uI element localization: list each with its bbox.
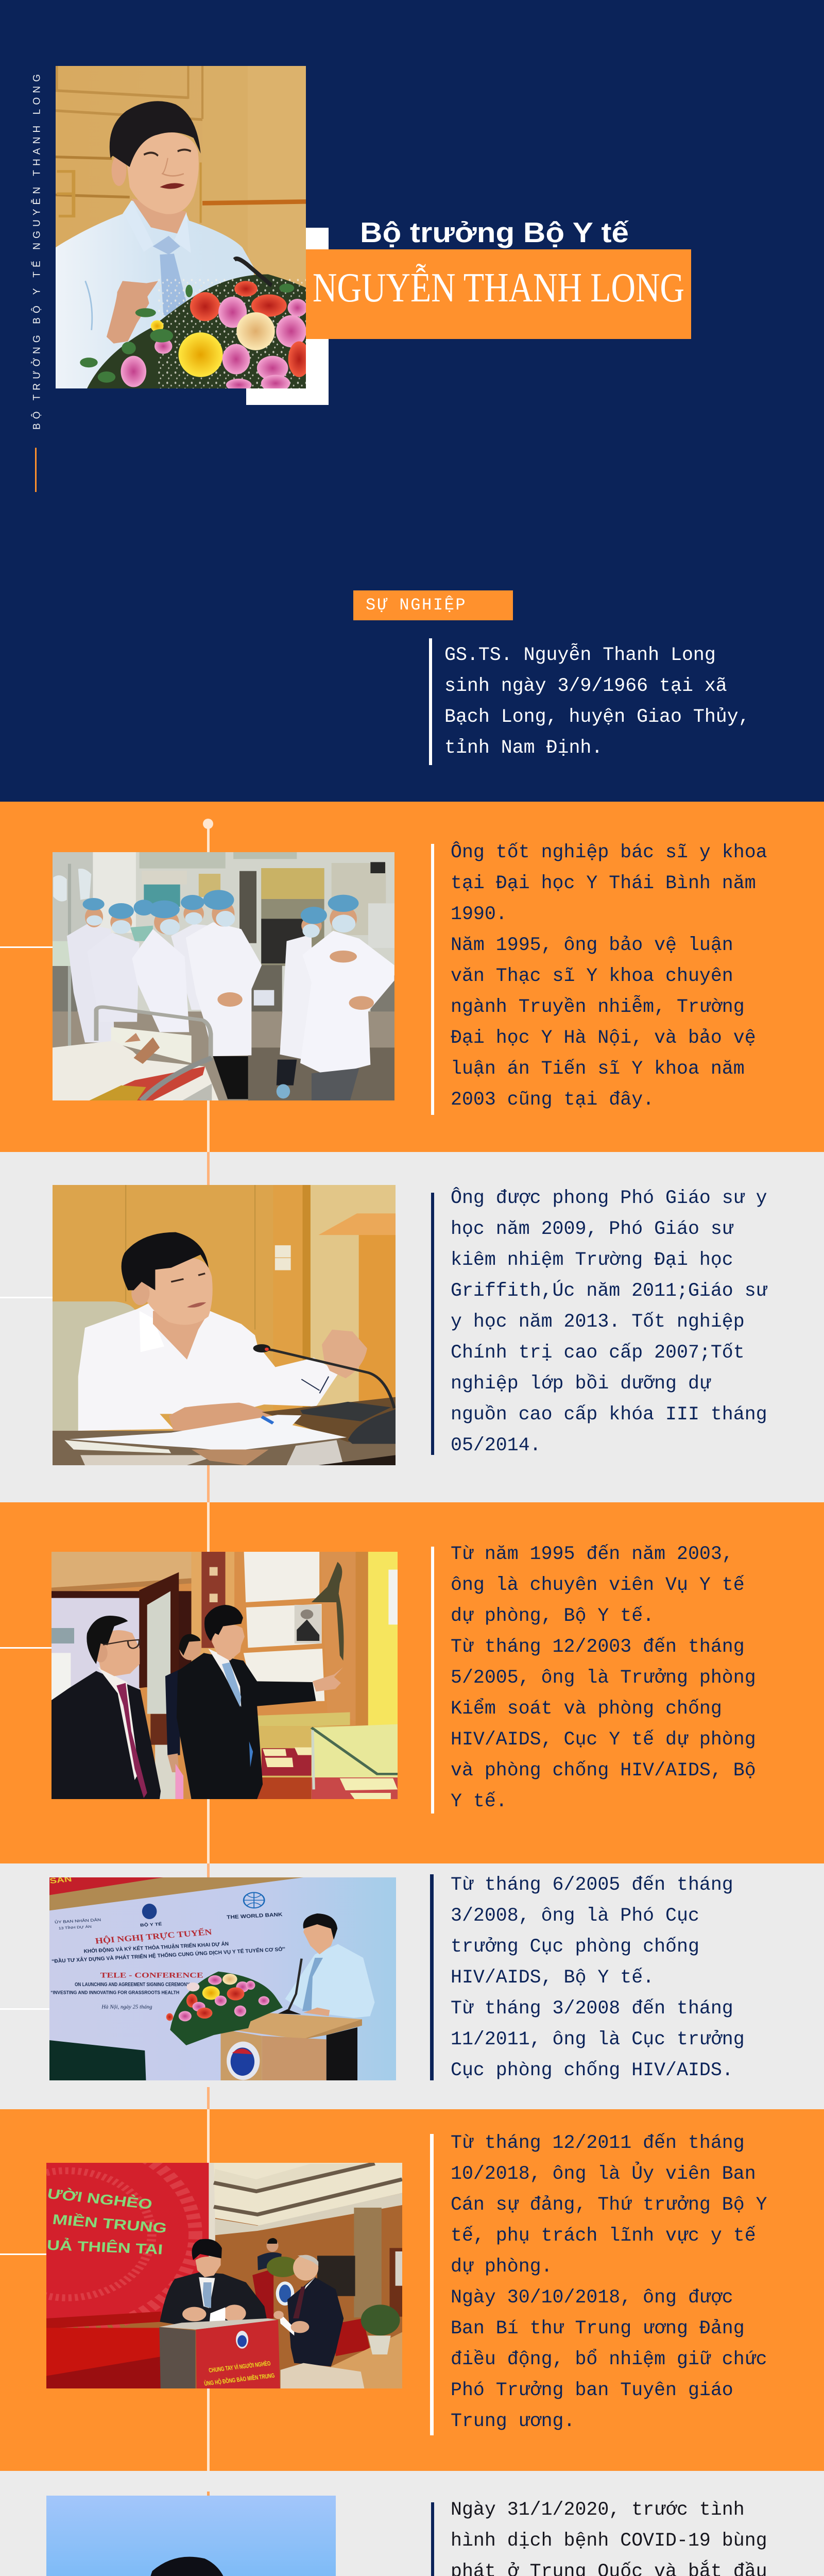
- section tag: career: SỰ NGHIỆP: [366, 596, 467, 615]
- name banner: [306, 249, 691, 339]
- section tag: career: [353, 590, 513, 620]
- accent bar: [429, 638, 432, 765]
- text: 2005–2011 roles: Từ tháng 6/2005 đến tháng 3/2008, ông là Phó Cục trưởng Cục phòng chống HIV/AIDS, Bộ Y tế. Từ tháng 3/2008 đến tháng 11/2011, ông là Cục trưởng Cục phòng chống HIV/AIDS.: [451, 1874, 745, 2081]
- photo: tele-conference speech: [49, 1877, 396, 2080]
- photo: doctors at hospital bedside: [53, 852, 394, 1100]
- banner text: “ĐẦU TƯ XÂY DỰNG VÀ PHÁT TRIỂN HỆ THỐNG CUNG ỨNG DỊCH VỤ Y TẾ TUYẾN CƠ SỞ”: [52, 1946, 286, 1964]
- panel: academic titles: [0, 1152, 824, 1502]
- banner text: KHỞI ĐỘNG VÀ KÝ KẾT THỎA THUẬN TRIỂN KHAI DỰ ÁN: [83, 1941, 229, 1954]
- panel: hero header: [0, 0, 824, 802]
- slogan on screen: [46, 2185, 168, 2257]
- text: 2011–2018 roles: Từ tháng 12/2011 đến tháng 10/2018, ông là Ủy viên Ban Cán sự đảng, Thứ trưởng Bộ Y tế, phụ trách lĩnh vực y tế dự phòng. Ngày 30/10/2018, ông được Ban Bí thư Trung ương Đảng điều động, bổ nhiệm giữ chức Phó Trưởng ban Tuyên giáo Trung ương.: [451, 2132, 767, 2432]
- donation box: ỦNG HỘ ĐỒNG BÀO MIỀN TRUNG: [203, 2371, 276, 2387]
- white backing block: [246, 228, 329, 405]
- title: Bộ trưởng Bộ Y tế: [360, 216, 629, 248]
- lectern with ministry seal: [218, 2013, 362, 2080]
- text: 1995–2005 roles: Từ năm 1995 đến năm 2003, ông là chuyên viên Vụ Y tế dự phòng, Bộ Y tế. Từ tháng 12/2003 đến tháng 5/2005, ông là Trưởng phòng Kiểm soát và phòng chống HIV/AIDS, Cục Y tế dự phòng và phòng chống HIV/AIDS, Bộ Y tế.: [451, 1544, 756, 1812]
- vertical side caption: BỘ TRƯỞNG BỘ Y TẾ NGUYỄN THANH LONG: [31, 74, 42, 430]
- accent bar: [431, 2502, 434, 2576]
- people in white coats: [67, 890, 394, 1100]
- panel: career 2005–2011: [0, 1863, 824, 2109]
- accent bar: [431, 1547, 434, 1814]
- orange accent line: [35, 448, 37, 492]
- three men in dark suits: [52, 1605, 343, 1799]
- photo: portrait speaking at podium: [56, 66, 306, 388]
- accent bar: [430, 2134, 434, 2435]
- photo: seated at meeting table: [53, 1185, 396, 1465]
- donation box: CHUNG TAY VÌ NGƯỜI NGHÈO: [208, 2359, 271, 2374]
- main man at ballot box: [160, 2239, 267, 2325]
- slogan on screen: ƯỜI NGHÈO: [46, 2185, 153, 2212]
- banner text: ON LAUNCHING AND AGREEMENT SIGNING CEREMONY: [75, 1981, 190, 1988]
- text: education: Ông tốt nghiệp bác sĩ y khoa tại Đại học Y Thái Bình năm 1990. Năm 1995, ông bảo vệ luận văn Thạc sĩ Y khoa chuyên ngành Truyền nhiễm, Trường Đại học Y Hà Nội, và bảo vệ luận án Tiến sĩ Y khoa năm 2003 cũng tại đây.: [451, 842, 767, 1110]
- banner text: [50, 1911, 286, 2010]
- accent bar: [430, 1874, 434, 2080]
- patient bed: [53, 1007, 219, 1100]
- plant: [361, 2304, 400, 2354]
- accent bar: [431, 844, 434, 1115]
- panel: career 1995–2005: [0, 1502, 824, 1863]
- panel: COVID-19 response: [0, 2471, 824, 2576]
- seated man: [78, 1232, 367, 1434]
- accent bar: [431, 1193, 434, 1455]
- slogan on screen: MIỀN TRUNG: [52, 2211, 168, 2236]
- banner text: THE WORLD BANK: [227, 1911, 283, 1920]
- photo: visit to museum exhibit: [52, 1552, 398, 1799]
- slogan on screen: UẢ THIÊN TAI: [46, 2237, 163, 2257]
- panel: career 2011–2018: [0, 2109, 824, 2471]
- flower arrangement: [166, 1972, 283, 2045]
- speaker at lectern: [278, 1913, 374, 2018]
- text: academic titles: Ông được phong Phó Giáo sư y học năm 2009, Phó Giáo sư kiêm nhiệm Trường Đại học Griffith,Úc năm 2011;Giáo sư y học năm 2013. Tốt nghiệp Chính trị cao cấp 2007;Tốt nghiệp lớp bồi dưỡng dự nguồn cao cấp khóa III tháng 05/2014.: [451, 1188, 767, 1456]
- photo: donation box ceremony: [46, 2163, 402, 2388]
- timeline segment with start dot: [203, 819, 213, 1152]
- banner text: “INVESTING AND INNOVATING FOR GRASSROOTS HEALTH: [50, 1990, 179, 1995]
- lectern and speaker: [252, 2238, 299, 2318]
- man in navy suit: [108, 2557, 330, 2576]
- banner text: BỘ Y TẾ: [140, 1922, 162, 1928]
- banner text: 13 TỈNH DỰ ÁN: [58, 1925, 92, 1930]
- banner text: ỦY BAN NHÂN DÂN: [55, 1917, 101, 1924]
- banner text: HỘI NGHỊ TRỰC TUYẾN: [95, 1927, 213, 1946]
- donation box: [159, 2318, 280, 2388]
- panel: education: [0, 802, 824, 1152]
- banner text: TELE - CONFERENCE: [100, 1971, 203, 1979]
- photo: portrait at lectern with ministry seal: [46, 2496, 336, 2576]
- text: birth info: GS.TS. Nguyễn Thanh Long sinh ngày 3/9/1966 tại xã Bạch Long, huyện Giao Thủy, tỉnh Nam Định.: [444, 645, 750, 758]
- second man holding envelope: [273, 2255, 344, 2366]
- banner text: Hà Nội, ngày 25 tháng: [101, 2004, 152, 2010]
